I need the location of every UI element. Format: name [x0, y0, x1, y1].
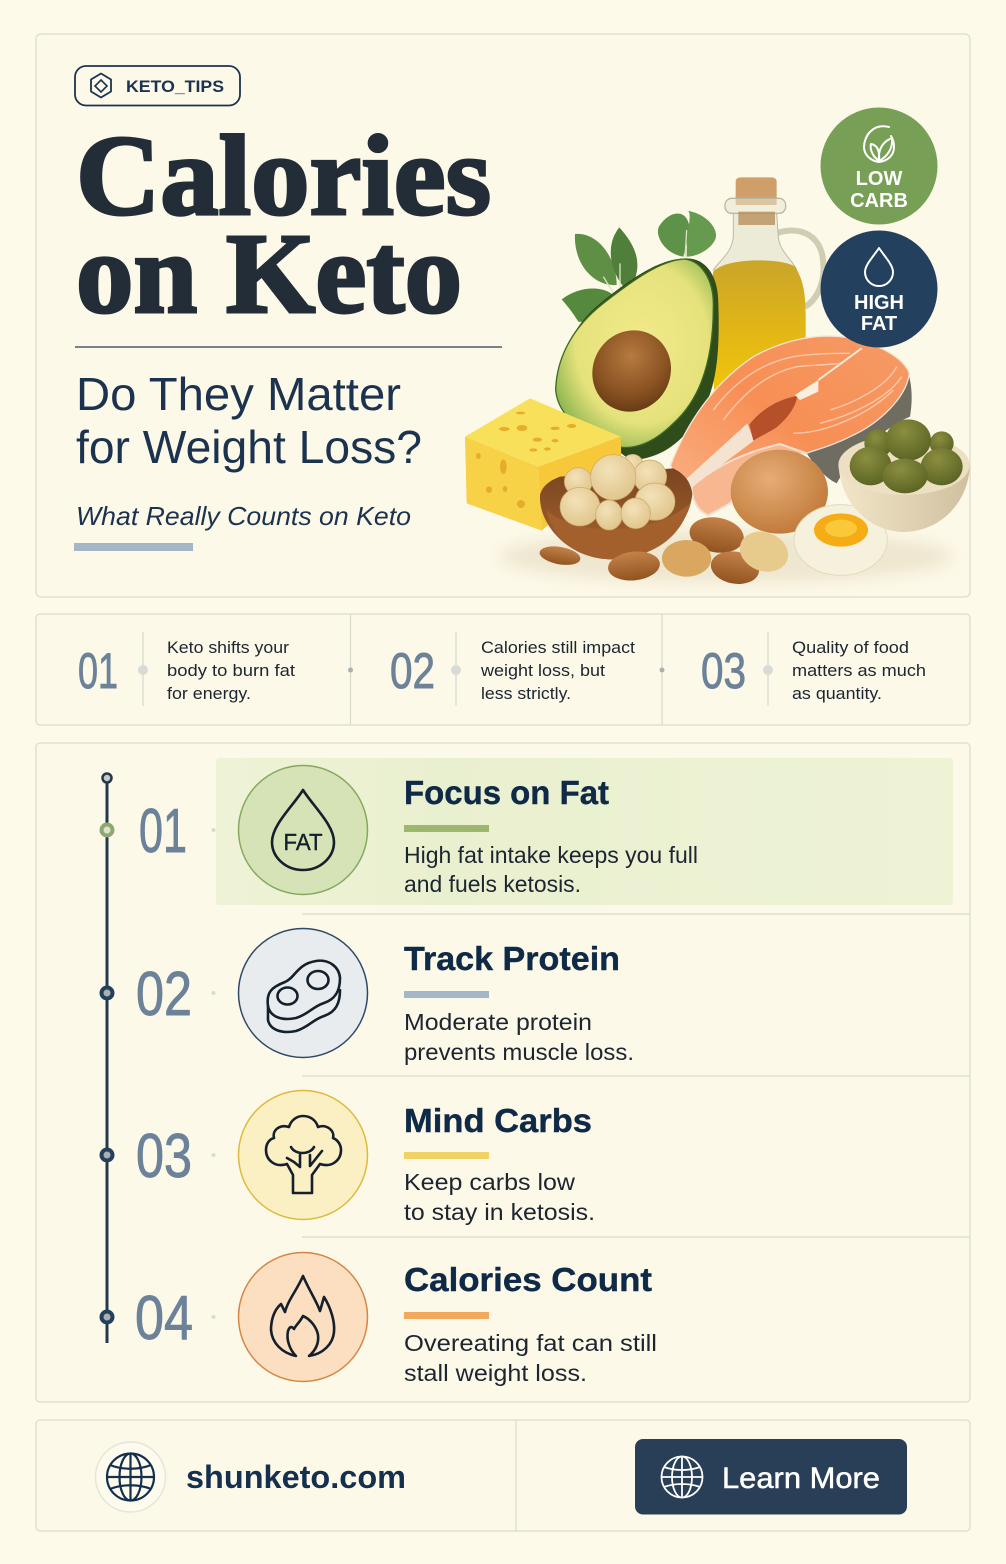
- tag: KETO_TIPS: [75, 66, 240, 106]
- badge: low carb: CARB: [850, 190, 908, 212]
- point 03: [701, 632, 926, 706]
- badge: high fat: FAT: [861, 313, 897, 335]
- point 02: 02: [390, 643, 435, 699]
- timeline: [102, 774, 112, 1343]
- badge: low carb: [820, 108, 938, 224]
- tip 04: calories count: [135, 1252, 657, 1386]
- panel: tips list: [36, 743, 970, 1402]
- tip 01: focus on fat: 01: [139, 797, 187, 866]
- icon: broccoli: [238, 1090, 368, 1220]
- button: learn more: Learn More: [722, 1462, 880, 1495]
- tip 04: calories count: stall weight loss.: [404, 1360, 587, 1386]
- tip 02: track protein: prevents muscle loss.: [404, 1039, 634, 1065]
- tag: KETO_TIPS: KETO_TIPS: [126, 78, 224, 96]
- subtitle: [76, 368, 422, 473]
- point 01: body to burn fat: [167, 662, 295, 680]
- tip 01: focus on fat: Focus on Fat: [404, 774, 609, 811]
- eggs: [731, 450, 887, 575]
- icon: fat drop: [238, 766, 368, 894]
- button: learn more: [635, 1439, 907, 1514]
- point 01: 01: [78, 643, 118, 699]
- tip 02: track protein: Track Protein: [404, 940, 620, 977]
- title: on Keto: [76, 210, 462, 337]
- badge: high fat: [820, 230, 938, 348]
- tip 02: track protein: 02: [136, 960, 192, 1029]
- point 03: 03: [701, 643, 746, 699]
- badge: high fat: HIGH: [854, 292, 904, 314]
- point 03: as quantity.: [792, 685, 882, 703]
- point 02: less strictly.: [481, 685, 571, 703]
- tip 03: mind carbs: Mind Carbs: [404, 1102, 592, 1139]
- tip 04: calories count: Overeating fat can still: [404, 1330, 657, 1356]
- point 01: Keto shifts your: [167, 639, 290, 657]
- point 01: [78, 632, 295, 706]
- title: Calories: [76, 112, 491, 239]
- tip 01: focus on fat: High fat intake keeps you full: [404, 842, 698, 868]
- oil bottle: [712, 177, 824, 402]
- tagline: What Really Counts on Keto: [76, 501, 411, 531]
- point 03: Quality of food: [792, 639, 909, 657]
- point 03: matters as much: [792, 662, 926, 680]
- icon: flame: [238, 1252, 368, 1382]
- panel: key points strip: [36, 614, 970, 725]
- title: [76, 112, 491, 337]
- almonds and nuts: [538, 513, 794, 588]
- macadamia bowl: [540, 454, 692, 559]
- tip 02: track protein: [136, 928, 634, 1065]
- tip 03: mind carbs: 03: [136, 1122, 192, 1191]
- tip 03: mind carbs: Keep carbs low: [404, 1169, 575, 1195]
- cheese: [465, 398, 621, 531]
- icon: steak: [238, 928, 368, 1058]
- panel: header: [36, 34, 970, 597]
- tip 02: track protein: Moderate protein: [404, 1009, 592, 1035]
- subtitle: for Weight Loss?: [76, 421, 422, 473]
- point 02: [390, 632, 635, 706]
- salmon steak: [671, 336, 912, 515]
- point 02: Calories still impact: [481, 639, 635, 657]
- badge: low carb: LOW: [856, 168, 902, 190]
- leaves: [562, 211, 716, 322]
- point 01: for energy.: [167, 685, 251, 703]
- tip 04: calories count: Calories Count: [404, 1261, 652, 1298]
- subtitle: Do They Matter: [76, 368, 401, 420]
- illustration: keto foods: [465, 177, 970, 588]
- tip 01: focus on fat: [139, 766, 698, 897]
- tip 03: mind carbs: [136, 1090, 595, 1225]
- olive bowl: [838, 419, 970, 532]
- website: shunketo.com: [186, 1459, 406, 1495]
- avocado: [556, 258, 719, 460]
- tip 03: mind carbs: to stay in ketosis.: [404, 1199, 595, 1225]
- tip 01: focus on fat: and fuels ketosis.: [404, 871, 581, 897]
- icon: globe: [96, 1442, 166, 1512]
- tip 04: calories count: 04: [135, 1284, 193, 1353]
- point 02: weight loss, but: [480, 662, 605, 680]
- panel: footer: [36, 1420, 970, 1531]
- icon: fat drop: FAT: [284, 829, 322, 855]
